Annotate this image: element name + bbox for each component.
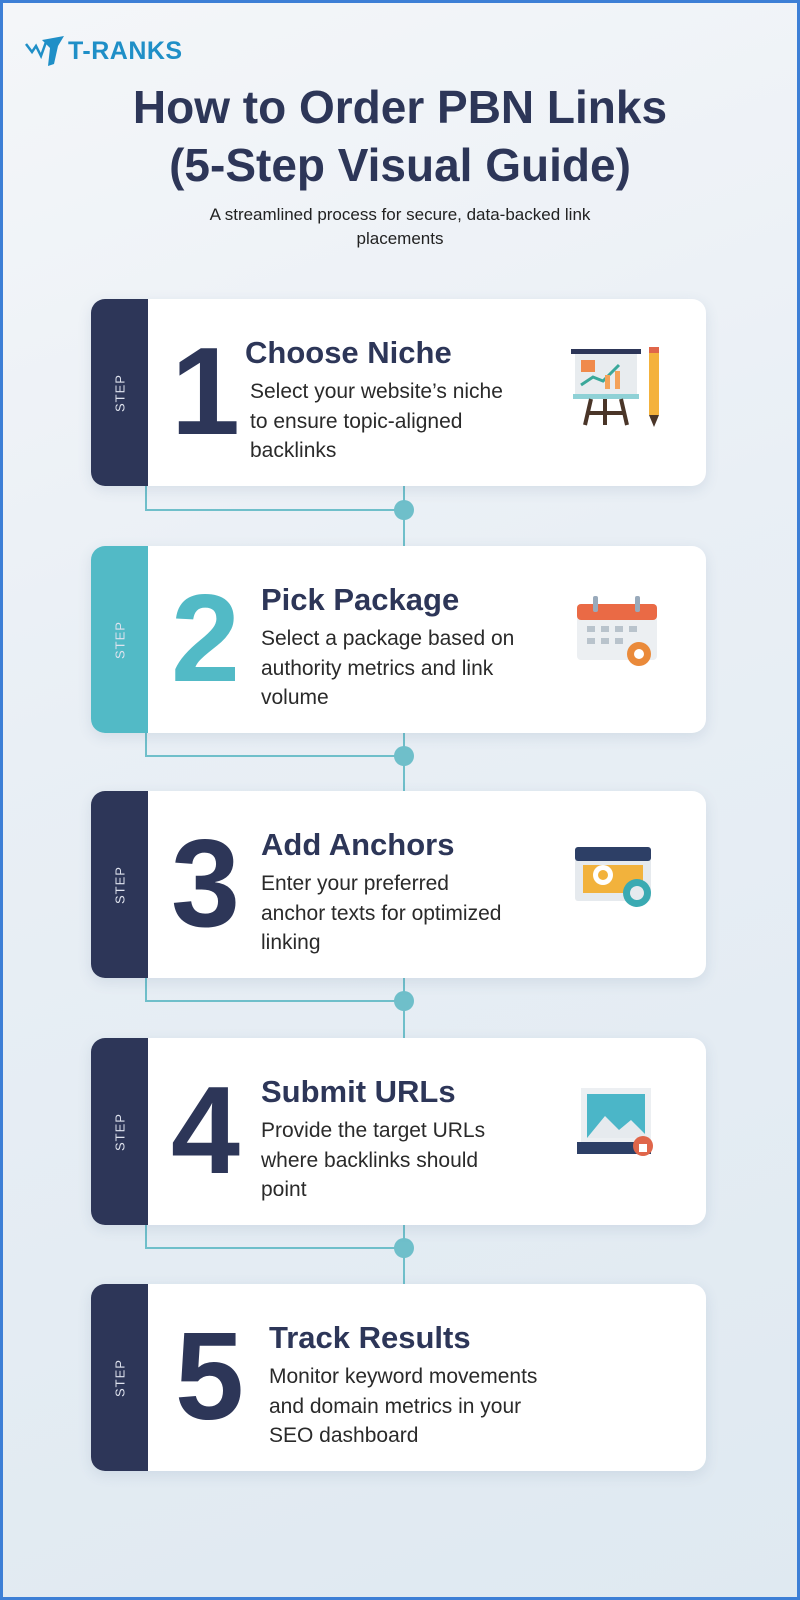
panel: step 4: Provide the target URLs: [261, 1119, 485, 1142]
panel: step 3: anchor texts for optimized: [261, 902, 501, 924]
panel: step 1: [91, 299, 706, 486]
subtitle: [210, 205, 590, 248]
subtitle: A streamlined process for secure, data-backed link: [210, 205, 590, 224]
connector 1: [145, 486, 414, 546]
heading: Pick Package: Pick Package: [261, 582, 459, 617]
panel: step 3: linking: [261, 931, 321, 954]
panel: step 4: where backlinks should: [261, 1148, 478, 1172]
panel: step 5: [91, 1284, 706, 1471]
panel: step 4: 4: [171, 1062, 240, 1200]
icon: landscape screen: [577, 1088, 653, 1156]
logo: T-RANKS: [68, 37, 183, 65]
panel: step 1: STEP: [112, 374, 127, 411]
connector 4: [145, 1225, 414, 1284]
panel: step 2: 2: [171, 570, 240, 708]
title: How to Order PBN Links: [133, 81, 667, 133]
panel: step 1: Select your website’s niche: [250, 380, 503, 403]
panel: step 5: STEP: [112, 1359, 127, 1396]
panel: step 5: SEO dashboard: [269, 1424, 418, 1447]
panel: step 1: backlinks: [250, 439, 336, 462]
title: (5-Step Visual Guide): [169, 139, 631, 191]
subtitle: placements: [357, 229, 443, 248]
panel: step 5: and domain metrics in your: [269, 1394, 521, 1418]
icon: calendar: [577, 596, 657, 666]
panel: step 4: point: [261, 1178, 307, 1201]
title: [133, 81, 667, 191]
heading: Submit URLs: Submit URLs: [261, 1074, 456, 1109]
panel: step 3: STEP: [112, 866, 127, 903]
connector 2: [145, 733, 414, 791]
panel: step 5: 5: [175, 1308, 244, 1446]
panel: step 3: [91, 791, 706, 978]
panel: step 1: to ensure topic-aligned: [250, 410, 462, 432]
heading: Choose Niche: Choose Niche: [245, 335, 452, 370]
panel: step 2: volume: [261, 686, 329, 709]
panel: step 1: 1: [171, 323, 240, 461]
panel: step 4: [91, 1038, 706, 1225]
icon: easel chart: [571, 347, 659, 427]
panel: step 4: STEP: [112, 1113, 127, 1150]
panel: step 5: Monitor keyword movements: [269, 1365, 537, 1388]
heading: Add Anchors: Add Anchors: [261, 827, 454, 862]
panel: step 2: STEP: [112, 621, 127, 658]
panel: step 2: authority metrics and link: [261, 656, 493, 680]
panel: step 3: Enter your preferred: [261, 872, 449, 895]
heading: Track Results: Track Results: [269, 1320, 471, 1355]
panel: step 3: 3: [171, 815, 240, 953]
logo: [25, 36, 183, 66]
panel: step 2: Select a package based on: [261, 627, 514, 650]
panel: step 2: [91, 546, 706, 733]
icon: image with search: [575, 847, 651, 907]
connector 3: [145, 978, 414, 1038]
